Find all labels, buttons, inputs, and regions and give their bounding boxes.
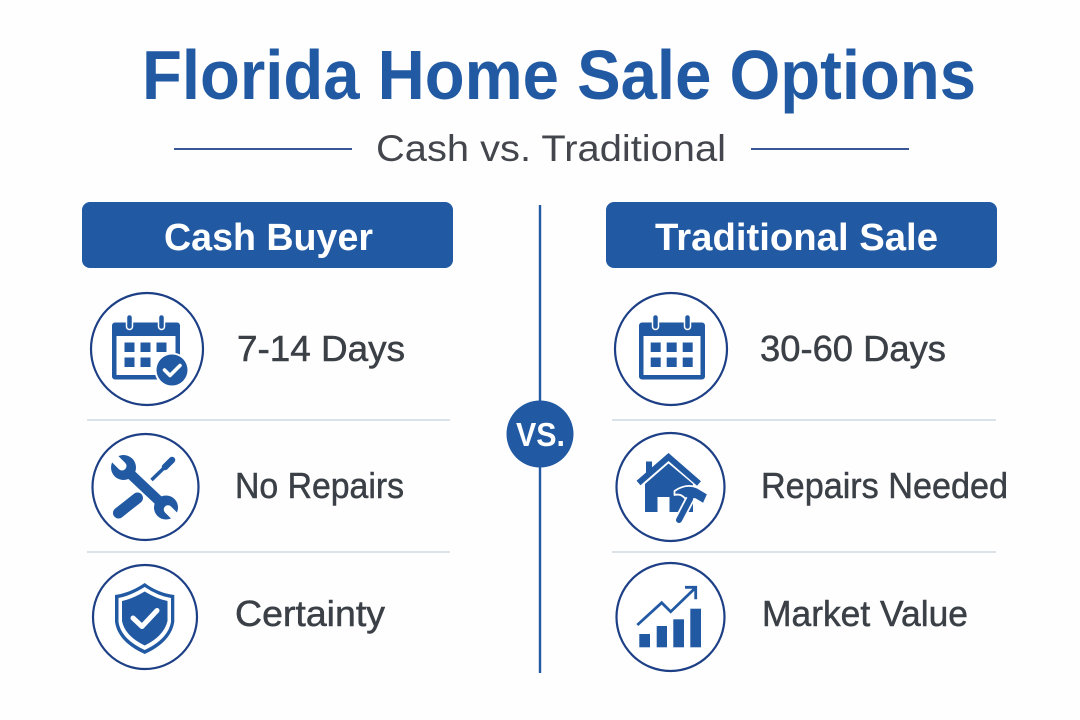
row: 30-60 days <box>615 293 946 405</box>
icon: wrench and screwdriver <box>111 455 178 520</box>
row: 7-14 days <box>91 293 405 405</box>
title: Florida Home Sale Options <box>142 36 976 114</box>
heading: traditional sale <box>606 202 997 268</box>
row: 7-14 days: 7-14 Days <box>237 328 405 369</box>
icon: shield with check <box>115 583 174 654</box>
icon: calendar <box>639 314 705 380</box>
center divider with VS badge: VS. <box>516 416 565 453</box>
row: 30-60 days: 30-60 Days <box>760 328 946 369</box>
row: certainty: Certainty <box>235 593 385 634</box>
row: repairs needed: Repairs Needed <box>761 465 1008 506</box>
icon: house with hammer <box>638 457 708 520</box>
row: market value: Market Value <box>762 593 968 634</box>
icon: rising bar chart <box>637 587 701 647</box>
row: no repairs <box>92 434 404 540</box>
center divider with VS badge <box>506 205 574 673</box>
panel: traditional sale <box>606 202 1008 671</box>
row: repairs needed <box>616 433 1008 541</box>
row: certainty <box>93 565 385 669</box>
panel: cash buyer <box>82 202 453 669</box>
heading: cash buyer: Cash Buyer <box>164 217 373 259</box>
icon: calendar with check <box>112 314 190 388</box>
row: market value <box>616 563 968 671</box>
row: no repairs: No Repairs <box>235 465 404 506</box>
heading: cash buyer <box>82 202 453 268</box>
heading: traditional sale: Traditional Sale <box>655 217 938 259</box>
subtitle: Cash vs. Traditional <box>376 128 726 169</box>
